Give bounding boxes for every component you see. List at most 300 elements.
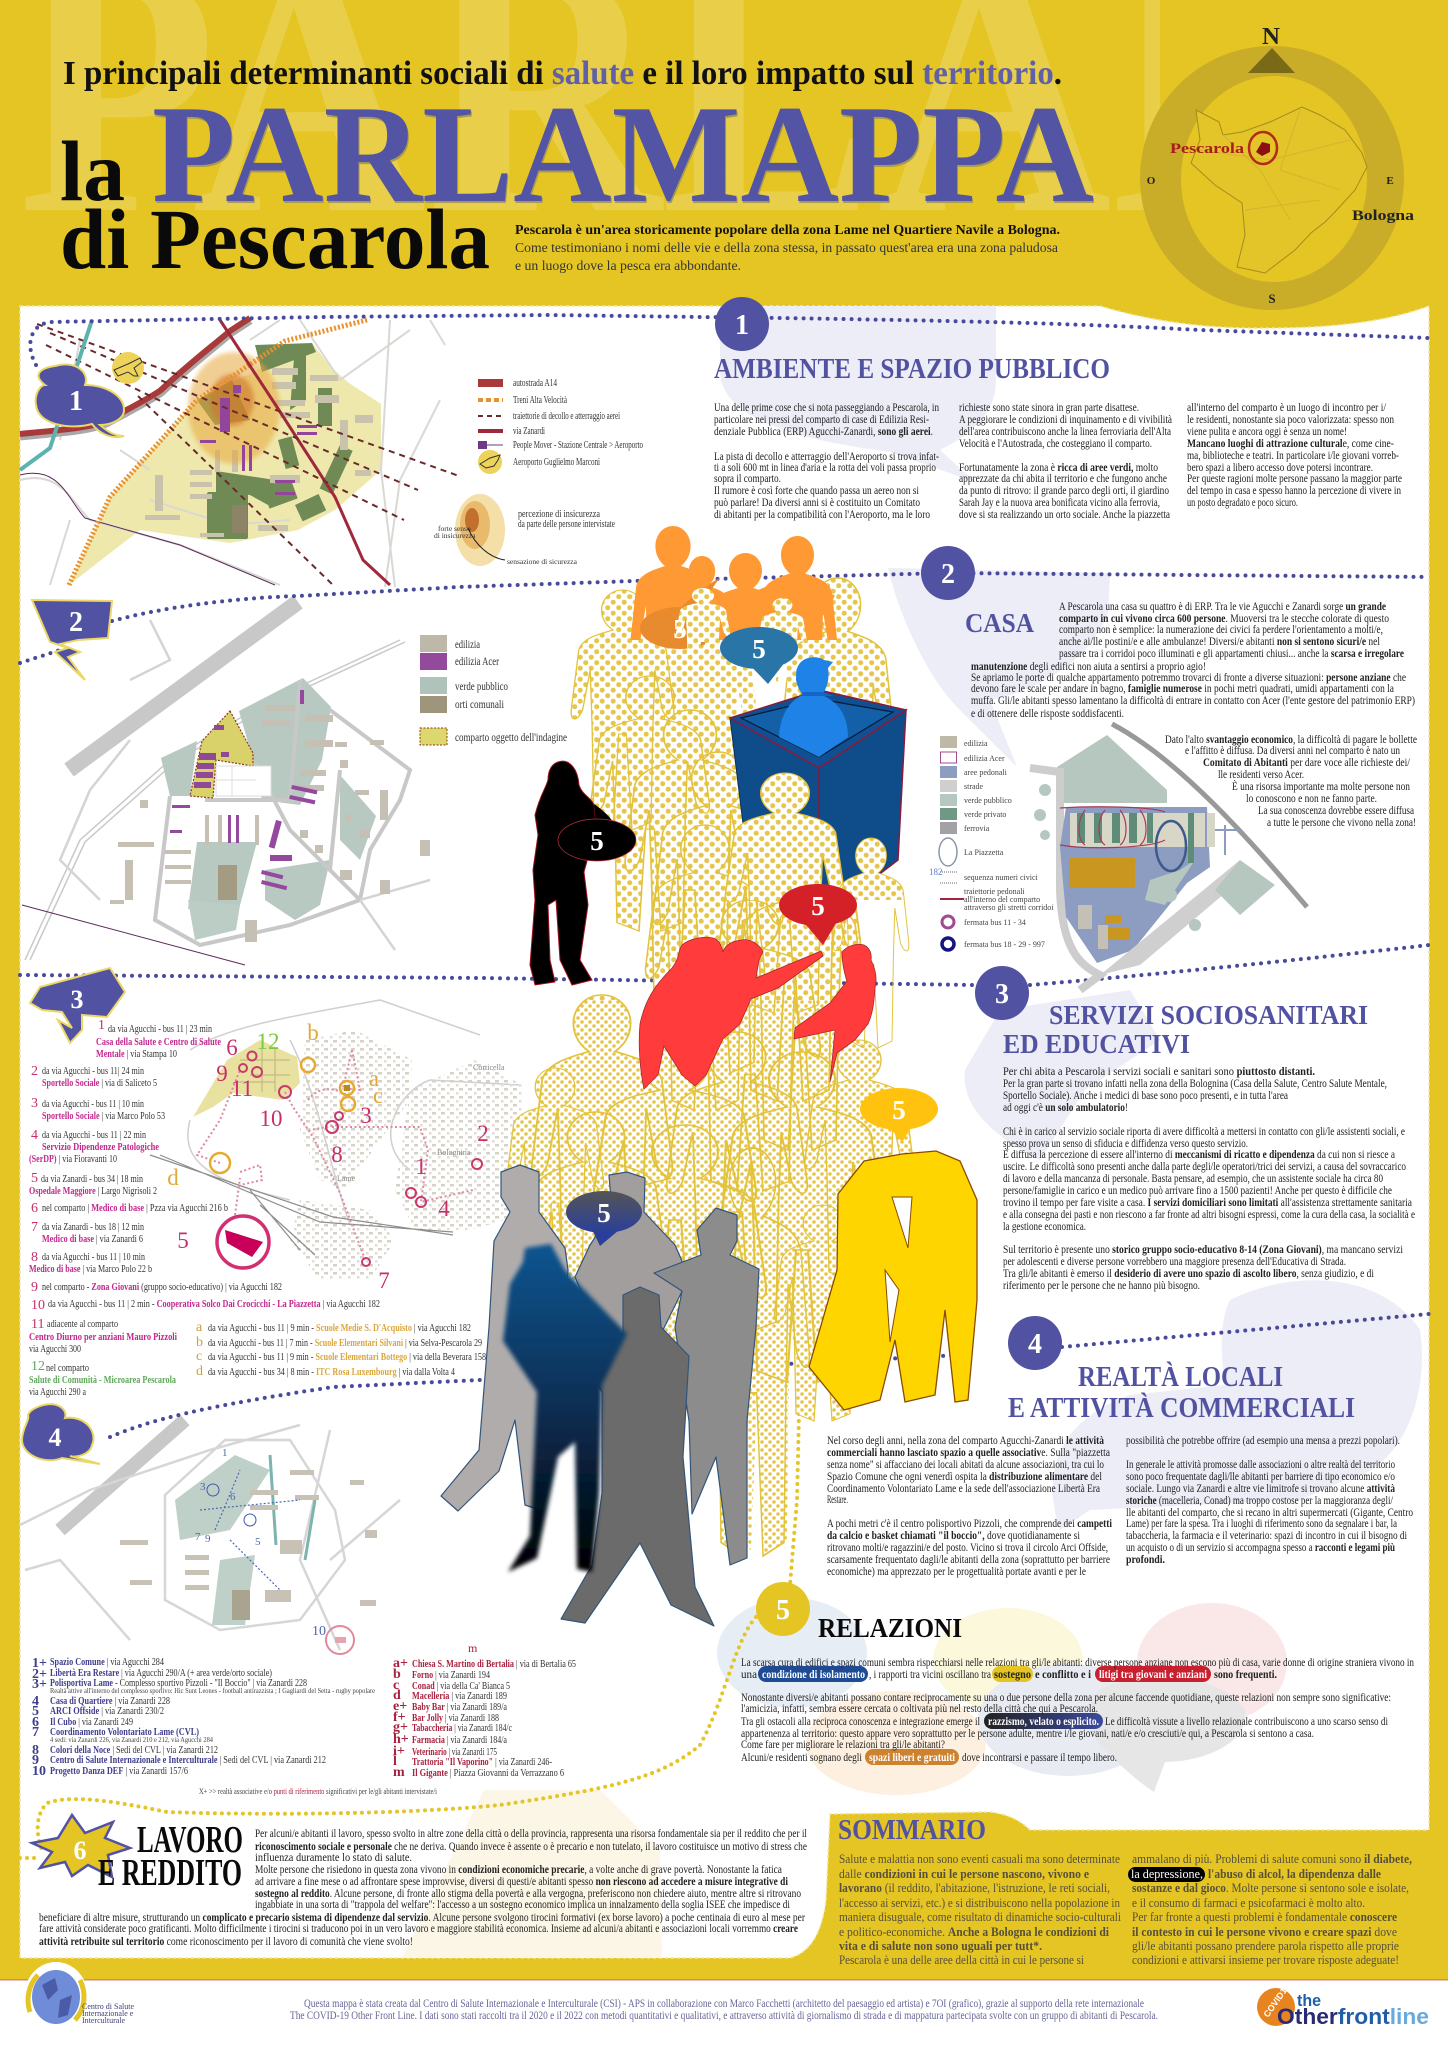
body: Se apriamo le porte di qualche appartamento potremmo trovarci di fronte a diverse situazioni: persone anziane che	[971, 670, 1406, 684]
realities list: l	[393, 1754, 397, 1769]
legend map 1: Treni Alta Velocità	[513, 395, 567, 406]
heading: RELAZIONI	[818, 1613, 962, 1643]
map 3: services: Lame	[337, 1174, 356, 1183]
column one: l'accesso ai servizi, etc.) e si distribuiscono nella popolazione in	[839, 1895, 1120, 1910]
body: È diffusa la percezione di essere all'interno di meccanismi di ricatto e dipendenza da cui non si riesce a	[1003, 1147, 1396, 1161]
column one: senza nome" si affacciano dei locali abitati da alcune associazioni, tra cui lo	[827, 1457, 1104, 1471]
body: Tra gli/le abitanti è emerso il desiderio di avere uno spazio di ascolto libero, senza giudizio, e di	[1003, 1266, 1375, 1280]
logo: the Other front line: the	[1297, 1991, 1321, 2010]
column one: Coordinamento Volontariato Lame e la sede dell'associazione Libertà Era	[827, 1481, 1101, 1495]
realities list	[32, 1656, 576, 1796]
map 3: services: 7	[378, 1268, 390, 1293]
legend housing map: edilizia Acer	[964, 754, 1005, 763]
column three: bero spazi a libero accesso dove potersi incontrare.	[1187, 460, 1373, 474]
map 4: local realities: 9	[205, 1533, 211, 1545]
column one: può parlare! Da diversi anni si è costituito un Comitato	[714, 495, 920, 509]
map 3: services: c	[373, 1083, 383, 1108]
heading: SERVIZI SOCIOSANITARI	[1049, 1000, 1368, 1030]
figure: gray group	[441, 1165, 759, 1626]
body: ad arrivare a fine mese o ad affrontare spese improvvise, diversi di questi/e abitanti spesso non riescono ad accedere a misure integrative di	[255, 1874, 789, 1888]
services list: Medico di base | via Marco Polo 22 b	[29, 1263, 152, 1275]
compass with Bologna map: N	[1262, 24, 1281, 50]
body: per adolescenti e diverse persone vorrebbero una maggiore presenza dell'Educativa di Strada.	[1003, 1254, 1346, 1268]
speech bubble: black	[558, 804, 636, 861]
section badge 1	[715, 297, 769, 351]
realities list: d	[393, 1688, 401, 1703]
realities list: 6	[32, 1715, 39, 1730]
body	[971, 599, 1415, 720]
legend map 2: verde pubblico	[455, 679, 508, 693]
housing text right: lo conoscono e non ne fanno parte.	[1246, 791, 1377, 805]
column one: Pescarola è una delle aree della città in cui le persone si	[839, 1952, 1084, 1967]
map badge 4 cloud: 4	[48, 1423, 62, 1452]
body: Sul territorio è presente uno storico gruppo socio-educativo 8-14 (Zona Giovani), ma mancano servizi	[1003, 1242, 1404, 1256]
services list: Mentale | via Stampa 10	[96, 1048, 177, 1060]
figure: crowd of dotted silhouettes	[507, 577, 913, 1558]
body: spesso prova un senso di sfiducia e diffidenza verso questo servizio.	[1003, 1136, 1248, 1150]
realities list: Centro di Salute Internazionale e Interculturale | Sedi del CVL | via Zanardi 212	[50, 1754, 326, 1766]
title line: I principali determinanti sociali di salute e il loro impatto sul territorio.	[63, 55, 1062, 92]
dotted route lines	[20, 315, 1429, 1437]
map 3: services: 1	[415, 1154, 427, 1179]
yellow dotted route	[20, 1414, 799, 1858]
body: comparto in cui vivono circa 600 persone. Muoversi tra le stecche colorate di questo	[1059, 611, 1389, 625]
body: una	[741, 1667, 758, 1681]
map 3: services: 2	[477, 1121, 489, 1146]
body: , i rapporti tra vicini oscillano tra	[869, 1667, 992, 1681]
white content panel	[20, 306, 1429, 1958]
summary panel	[838, 1814, 1412, 1967]
column two: sostanze e dal gioco. Molte persone si sentono sole e isolate,	[1132, 1880, 1409, 1895]
legend housing map: fermata bus 18 - 29 - 997	[964, 940, 1045, 949]
legend map 1: sensazione di sicurezza	[507, 557, 578, 566]
body: dove incontrarsi e passare il tempo libero.	[962, 1750, 1117, 1764]
services list: 1	[98, 1018, 105, 1033]
realities list: 4	[32, 1694, 39, 1709]
legend housing map: La Piazzetta	[964, 848, 1004, 857]
heading: REALTÀ LOCALI	[1078, 1360, 1283, 1393]
services list: c	[196, 1349, 202, 1364]
legend housing map: all'interno del comparto	[964, 895, 1040, 904]
section badge 4: 4	[1028, 1329, 1042, 1360]
column one: particolare nei pressi del comparto di case di Edilizia Resi-	[714, 412, 929, 426]
column three: all'interno del comparto è un luogo di incontro per i/	[1187, 400, 1387, 414]
speech bubble: orange: 5	[673, 614, 687, 644]
realities list: c	[393, 1678, 399, 1693]
column one: ti a soli 600 mt in linea d'aria e la rotta dei voli passa proprio	[714, 460, 936, 474]
column two	[1131, 1851, 1412, 1967]
section badge 2: 2	[941, 559, 955, 590]
section 3: services text	[1003, 1000, 1415, 1292]
body: riferimento per le persone che ne hanno più bisogno.	[1003, 1278, 1200, 1292]
body: beneficiare di altre misure, strutturando un complicato e precario sistema di dipendenze dal servizio. Alcune persone svolgono tirocini formativi (ex borse lavoro) a poche centinaia di euro al mese per	[39, 1910, 805, 1924]
section 1: environment text	[714, 354, 1402, 521]
column two	[1126, 1433, 1413, 1566]
realities list: Macelleria | via Zanardi 189	[412, 1690, 507, 1702]
realities list: Il Gigante | Piazza Giovanni da Verrazzano 6	[412, 1767, 564, 1779]
services list: 4	[31, 1128, 38, 1143]
legend housing map: traiettorie pedonali	[964, 887, 1025, 896]
legend map 1: autostrada A14	[513, 378, 557, 389]
services list	[29, 1018, 486, 1398]
realities list: 7	[32, 1725, 39, 1740]
column one: Nel corso degli anni, nella zona del comparto Agucchi-Zanardi le attività	[827, 1433, 1104, 1447]
person: dark gray	[654, 1208, 759, 1565]
column one: Salute e malattia non sono eventi casuali ma sono determinate	[839, 1851, 1120, 1866]
figure: dotted people in front of box	[676, 588, 910, 1049]
map 4: local realities: 3	[200, 1481, 206, 1493]
compass with Bologna map: Bologna	[1352, 208, 1415, 224]
realities list: Polisportiva Lame - Complesso sportivo Pizzoli - "Il Boccio" | via Zanardi 228	[50, 1677, 307, 1689]
services list: Casa della Salute e Centro di Salute	[96, 1036, 221, 1048]
body: e di ottenere delle risposte soddisfacenti.	[971, 706, 1124, 720]
map 3: services: 10	[260, 1106, 282, 1131]
column one: da calcio e basket chiamati "il boccio", dove quotidianamente si	[827, 1528, 1081, 1542]
services list: via Agucchi 290 a	[29, 1386, 86, 1398]
column two: condizioni e attivarsi insieme per trovare risposte adeguate!	[1132, 1952, 1399, 1967]
section 5: relationships text	[741, 1613, 1414, 1765]
realities list: 3+	[32, 1677, 47, 1692]
body: condizione di isolamento	[762, 1667, 865, 1681]
legend housing map: 182	[929, 867, 942, 877]
section badge 1: 1	[735, 310, 749, 341]
realities list: Libertà Era Restare | via Agucchi 290/A (+ area verde/orto sociale)	[50, 1667, 272, 1679]
section badge 4	[1008, 1316, 1062, 1370]
realities list: Baby Bar | via Zanardi 189/a	[412, 1701, 507, 1713]
speech bubble: yellow: 5	[892, 1095, 906, 1125]
hospital marker	[217, 1216, 269, 1268]
realities list: 10	[32, 1764, 46, 1779]
column two: la depressione,	[1131, 1866, 1203, 1881]
intro text: e un luogo dove la pesca era abbondante.	[515, 258, 741, 273]
map badge 3 lightning	[30, 968, 125, 1043]
legend housing map: aree pedonali	[964, 768, 1008, 777]
services list: 9	[31, 1280, 38, 1295]
legend map 2: orti comunali	[455, 697, 504, 711]
realities list: 2+	[32, 1667, 47, 1682]
services list: 10	[31, 1298, 45, 1313]
column two: Sarah Jay e la nuova area bonificata vicino alla ferrovia,	[959, 495, 1160, 509]
realities list: Farmacia | via Zanardi 184/a	[412, 1734, 507, 1746]
services list: da via Agucchi - bus 11| 24 min	[42, 1065, 144, 1077]
section 6: work text	[39, 1819, 808, 1948]
realities list: ARCI Offside | via Zanardi 230/2	[50, 1705, 164, 1717]
map badge 1 cloud	[36, 364, 124, 437]
person: darkest gray	[561, 1287, 714, 1626]
legend housing map: strade	[964, 782, 984, 791]
legend housing map: ferrovia	[964, 824, 990, 833]
column two: Per far fronte a questi problemi è fondamentale conoscere	[1132, 1909, 1397, 1924]
column one: di abitanti per la compatibilità con l'Aeroporto, ma le loro	[714, 507, 930, 521]
compass with Bologna map: Pescarola	[1170, 141, 1245, 157]
legend map 1: di insicurezza	[434, 531, 476, 540]
body: la gestione economica.	[1003, 1219, 1086, 1233]
housing map	[1030, 724, 1307, 990]
section 6: work star badge	[32, 1815, 130, 1877]
legend map 1: da parte delle persone intervistate	[518, 519, 615, 530]
logo: the Other front line: COVID19	[1261, 1982, 1292, 2019]
services list: 6	[31, 1201, 38, 1216]
section badge 3: 3	[995, 979, 1009, 1010]
map 3: services: a	[369, 1066, 379, 1091]
services list: da via Agucchi - bus 11 | 22 min	[42, 1129, 146, 1141]
footer credit text: Questa mappa è stata creata dal Centro di Salute Internazionale e Interculturale (CSI) - APS in collaborazione con Marco Facchetti (architetto del paesaggio ed artista) e 7OI (grafico), grazie al supporto della rete internazionale	[304, 1996, 1144, 2010]
map 3: services: d	[167, 1165, 179, 1190]
body	[39, 1826, 808, 1948]
map 4: local realities: 1	[222, 1447, 228, 1459]
realities list: Colori della Noce | Sedi del CVL | via Zanardi 212	[50, 1744, 218, 1756]
services list: via Agucchi 300	[29, 1343, 81, 1355]
services list: 5	[31, 1171, 38, 1186]
services list: Medico di base | via Zanardi 6	[42, 1233, 143, 1245]
realities list: Veterinario | via Zanardi 175	[412, 1746, 497, 1758]
body: anche ai/lle postini/e e alle ambulanze! Diversi/e abitanti non si sentono sicuri/e nel	[1059, 634, 1381, 648]
column three: un posto degradato e poco sicuro.	[1187, 495, 1298, 509]
services list: d	[196, 1364, 203, 1379]
logo: Centro di Salute: Interculturale	[82, 2016, 126, 2025]
services list: da via Zanardi - bus 34 | 18 min	[41, 1173, 143, 1185]
realities list: Tabaccheria | via Zanardi 184/c	[412, 1722, 512, 1734]
housing text right: Dato l'alto svantaggio economico, la difficoltà di pagare le bollette	[1165, 732, 1417, 746]
realities list: 1+	[32, 1656, 47, 1671]
legend map 1: via Zanardi	[513, 426, 545, 437]
column two: ammalano di più. Problemi di salute comuni sono il diabete,	[1132, 1851, 1412, 1866]
map 4: local realities: 10	[312, 1624, 326, 1639]
section badge 5: 5	[776, 1595, 790, 1626]
column one: commerciali hanno lasciato spazio a quelle associative. Sulla "piazzetta	[827, 1445, 1111, 1459]
column two: A peggiorare le condizioni di inquinamento e di vivibilità	[959, 412, 1173, 426]
realities list: f+	[393, 1710, 406, 1725]
map badge 2 lightning	[32, 600, 112, 680]
column one: ritrovano molti/e ragazzini/e del posto. Vicino si trova il circolo Arci Offside,	[827, 1540, 1108, 1554]
realities list: 5	[32, 1704, 39, 1719]
services list: 3	[31, 1096, 38, 1111]
body: Per chi abita a Pescarola i servizi sociali e sanitari sono piuttosto distanti.	[1003, 1064, 1315, 1078]
realities list: g+	[393, 1720, 408, 1735]
legend housing map: attraverso gli stretti corridoi	[964, 903, 1054, 912]
realities list: Realtà attive all'interno del complesso sportivo: Hic Sunt Leones - football antirazzista ; I Gagliardi del Setta - rugby popolare	[50, 1686, 376, 1695]
services list: 11	[31, 1317, 44, 1332]
body: A Pescarola una casa su quattro è di ERP. Tra le vie Agucchi e Zanardi sorge un grande	[1059, 599, 1387, 613]
map badge 2 lightning: 2	[69, 607, 83, 638]
body: Alcuni/e residenti sognano degli	[741, 1750, 863, 1764]
map 4: local realities: 7	[195, 1531, 201, 1543]
legend map 2: edilizia	[455, 637, 480, 651]
figure: yellow group	[809, 1151, 977, 1410]
legend map 1	[434, 378, 643, 566]
realities list: h+	[393, 1732, 409, 1747]
body: l'amicizia, infatti, sembra essere cercata o coltivata più nel resto della città che qui a Pescarola.	[741, 1701, 1098, 1715]
legend housing map: verde privato	[964, 810, 1006, 819]
legend map 1: People Mover - Stazione Centrale > Aeroporto	[513, 440, 643, 451]
column one: denziale Pubblica (ERP) Agucchi-Zanardi, sono gli aerei.	[714, 424, 933, 438]
services list: da via Agucchi - bus 11 | 10 min	[42, 1251, 145, 1263]
services list: b	[196, 1335, 203, 1350]
section 4: local realities text	[827, 1360, 1413, 1578]
person: light gray	[441, 1165, 568, 1511]
body: sono frequenti.	[1214, 1667, 1277, 1681]
speech bubble: red: 5	[811, 891, 825, 921]
figure: black woman	[530, 761, 596, 985]
heading: LAVORO	[137, 1819, 243, 1861]
services list: nel comparto | Medico di base | Pzza via Agucchi 216 b	[42, 1202, 228, 1214]
body: riconoscimento sociale e personale che ne deriva. Quando invece è assente o è precario e non tutelato, il lavoro costituisce un motivo di stress che	[255, 1839, 807, 1853]
column one: vita e di salute non sono uguali per tutt*.	[839, 1938, 1042, 1953]
column one	[714, 400, 939, 521]
realities list: Spazio Comune | via Agucchi 284	[50, 1656, 164, 1668]
services list: Ospedale Maggiore | Largo Nigrisoli 2	[29, 1185, 157, 1197]
person: mid gray	[575, 1172, 689, 1334]
realities list: Forno | via Zanardi 194	[412, 1669, 490, 1681]
column two: e il consumo di farmaci e psicofarmaci è molto alto.	[1132, 1895, 1365, 1910]
column one: sopra il comparto.	[714, 471, 781, 485]
services list: Sportello Sociale | via Marco Polo 53	[42, 1110, 165, 1122]
section 2: housing text	[929, 599, 1417, 990]
comparto highlight	[190, 711, 271, 798]
body: trovino il tempo per fare visite a casa. I servizi domiciliari sono limitati all'assistenza strettamente sanitaria	[1003, 1195, 1413, 1209]
column one	[839, 1851, 1121, 1967]
column two: apprezzate da chi abita il territorio e che fungono anche	[959, 471, 1167, 485]
services list: da via Zanardi - bus 18 | 12 min	[42, 1221, 144, 1233]
services list: da via Agucchi - bus 11 | 23 min	[108, 1023, 212, 1035]
housing text right: lle residenti verso Acer.	[1218, 767, 1304, 781]
column one: scarsamente frequentato dagli/le abitanti della zona (soprattutto per barriere	[827, 1552, 1110, 1566]
body: fare attività considerate poco gratificanti. Molto difficilmente i tirocini si traducono poi in un vero lavoro e maggiore stabilità economica. Insieme ad alcuni/a abitanti e associazioni locali vorremmo creare	[39, 1921, 799, 1935]
housing text right	[1165, 732, 1417, 829]
map badge 4 cloud	[22, 1404, 100, 1464]
realities list: b	[393, 1667, 401, 1682]
map 2: urban fabric	[22, 602, 430, 965]
body: Molte persone che risiedono in questa zona vivono in condizioni economiche precarie, a volte anche di grave povertà. Nonostante la fatica	[255, 1862, 783, 1876]
legend housing map: verde pubblico	[964, 796, 1012, 805]
column two: un acquisto o di un servizio si accompagna spesso a racconti e legami più	[1126, 1540, 1395, 1554]
body: e conflitto e i	[1035, 1667, 1092, 1681]
map 3: services: 6	[226, 1035, 238, 1060]
heading: SOMMARIO	[838, 1814, 986, 1846]
legend map 1: Aeroporto Guglielmo Marconi	[513, 457, 600, 468]
column one: maniera disuguale, come risultato di dinamiche socio-culturali	[839, 1909, 1121, 1924]
footer credit text: The COVID-19 Other Front Line. I dati sono stati raccolti tra il 2020 e il 2022 con metodi quantitativi e qualitativi, e attraverso attività di giornalismo di strada e di mappatura partecipata svolte con un gruppo di abitanti di Pescarola.	[290, 2008, 1158, 2022]
realities list: 4 sedi: via Zanardi 226, via Zanardi 210 e 212, via Agucchi 284	[50, 1735, 213, 1744]
body: manutenzione degli edifici non aiuta a sentirsi a proprio agio!	[971, 659, 1206, 673]
column two: l'abuso di alcol, la dipendenza dalle	[1208, 1866, 1381, 1881]
map 3: services: 12	[256, 1029, 280, 1054]
realities list: Casa di Quartiere | via Zanardi 228	[50, 1695, 170, 1707]
map 3: services: Bolognina	[437, 1148, 471, 1157]
body: ad oggi c'è un solo ambulatorio!	[1003, 1100, 1128, 1114]
realities list: Progetto Danza DEF | via Zanardi 157/6	[50, 1765, 188, 1777]
services list: Centro Diurno per anziani Mauro Pizzoli	[29, 1331, 177, 1343]
map 3: services: 3	[360, 1103, 372, 1128]
speech bubble: black: 5	[590, 826, 604, 856]
intro text	[515, 222, 1060, 273]
column one	[827, 1433, 1113, 1578]
map badge 1 cloud: 1	[69, 386, 83, 417]
section badge 5	[756, 1582, 810, 1636]
services list: da via Agucchi - bus 11 | 9 min - Scuole Elementari Bottego | via della Beverara 158	[208, 1351, 486, 1363]
map 1: environment	[20, 318, 459, 587]
column one: A pochi metri c'è il centro polisportivo Pizzoli, che comprende dei campetti	[827, 1516, 1113, 1530]
main heading PARLAMAPPA: di Pescarola	[60, 191, 490, 287]
logo: the Other front line: Otherfrontline	[1277, 2004, 1429, 2029]
figure: blue box with person	[730, 657, 906, 895]
services list: Salute di Comunità - Microarea Pescarola	[29, 1374, 176, 1386]
realities list: Trattoria "Il Vaporino" | via Zanardi 246-	[412, 1756, 552, 1768]
intro text: Come testimoniano i nomi delle vie e della zona stessa, in passato quest'area era una zona paludosa	[515, 240, 1058, 255]
body: Come fare per migliorare le relazioni tra gli/le abitanti?	[741, 1737, 945, 1751]
body: attività retribuite sul territorio come riconoscimento per il lavoro di comunità che viene svolto!	[39, 1934, 413, 1948]
realities list: Il Cubo | via Zanardi 249	[50, 1716, 133, 1728]
housing text right: Comitato di Abitanti per dare voce alle richieste dei/	[1203, 755, 1411, 769]
logo: Centro di Salute: Internazionale e	[82, 2009, 134, 2018]
body: sostegno al reddito. Alcune persone, di fronte allo stigma della povertà e alla vergogna, preferiscono non chiedere aiuto, mentre altre si ritrovano	[255, 1886, 801, 1900]
compass with Bologna map	[1140, 24, 1415, 310]
realities list: Conad | via della Ca' Bianca 5	[412, 1680, 510, 1692]
compass with Bologna map: S	[1268, 291, 1276, 306]
column two: Fortunatamente la zona è ricca di aree verdi, molto	[959, 460, 1158, 474]
column one: e politico-economiche. Anche a Bologna le condizioni di	[839, 1924, 1109, 1939]
icon: airport plane	[112, 352, 144, 384]
speech bubble: navy: 5	[597, 1198, 611, 1228]
column three	[1187, 400, 1402, 509]
realities list: e+	[393, 1699, 407, 1714]
realities list: Bar Jolly | via Zanardi 188	[412, 1712, 499, 1724]
realities list: 9	[32, 1753, 39, 1768]
map 3: services: b	[307, 1020, 319, 1045]
heading: E REDDITO	[98, 1852, 242, 1894]
services list: (SerDP) | via Fioravanti 10	[29, 1153, 117, 1165]
highlight pills	[758, 1666, 1211, 1765]
column two: profondi.	[1126, 1552, 1165, 1566]
compass with Bologna map: O	[1147, 175, 1156, 187]
realities list: Chiesa S. Martino di Bertalia | via di Bertalia 65	[412, 1658, 576, 1670]
speech bubble: blue: 5	[752, 634, 766, 664]
realities list: m	[393, 1765, 405, 1780]
section 6: work star badge: 6	[74, 1836, 86, 1865]
logo: Centro di Salute	[24, 1962, 134, 2032]
map badge 3 lightning: 3	[70, 985, 84, 1014]
speech bubble: blue	[720, 627, 798, 684]
figure: red pair	[639, 937, 876, 1089]
footer credit text	[290, 1996, 1158, 2022]
map 3: services: 8	[331, 1142, 343, 1167]
heading: AMBIENTE E SPAZIO PUBBLICO	[714, 354, 1110, 385]
footer strip	[0, 1979, 1448, 2048]
realities list: 8	[32, 1743, 39, 1758]
services list: 2	[31, 1064, 38, 1079]
body: sostegno	[994, 1667, 1031, 1681]
services list: 12	[31, 1359, 45, 1374]
column two: richieste sono state sinora in gran parte disattese.	[959, 400, 1139, 414]
services list: a	[196, 1320, 203, 1335]
heading	[98, 1819, 243, 1894]
legend map 1: traiettorie di decollo e atterraggio aerei	[513, 411, 620, 422]
column one: lavorano (il reddito, l'abitazione, l'istruzione, le reti sociali,	[839, 1880, 1110, 1895]
map 3: services: 9	[216, 1061, 228, 1086]
body: spazi liberi e gratuiti	[869, 1750, 956, 1764]
column one: dalle condizioni in cui le persone nascono, vivono e	[839, 1866, 1089, 1881]
legend map 1: percezione di insicurezza	[518, 509, 600, 520]
column two: il contesto in cui le persone vivono e creare spazi dove	[1132, 1924, 1397, 1939]
body: passare tra i corridoi poco illuminati e gli appartamenti chiusi... anche la scarsa e irregolare	[1059, 646, 1405, 660]
figure: blue gradient person	[503, 1244, 627, 1572]
speech bubble: red	[779, 884, 857, 945]
map 3: services: 5	[177, 1228, 189, 1253]
services list: Sportello Sociale | via di Saliceto 5	[42, 1077, 157, 1089]
services list: da via Agucchi - bus 11 | 7 min - Scuole Elementari Silvani | via Selva-Pescarola 29	[208, 1337, 482, 1349]
body: ingabbiate in una sorta di "trappola del welfare": l'accesso a un sostegno economico implica un innalzamento della soglia ISEE che impedisce di	[255, 1897, 791, 1911]
services list: Servizio Dipendenze Patologiche	[42, 1141, 159, 1153]
